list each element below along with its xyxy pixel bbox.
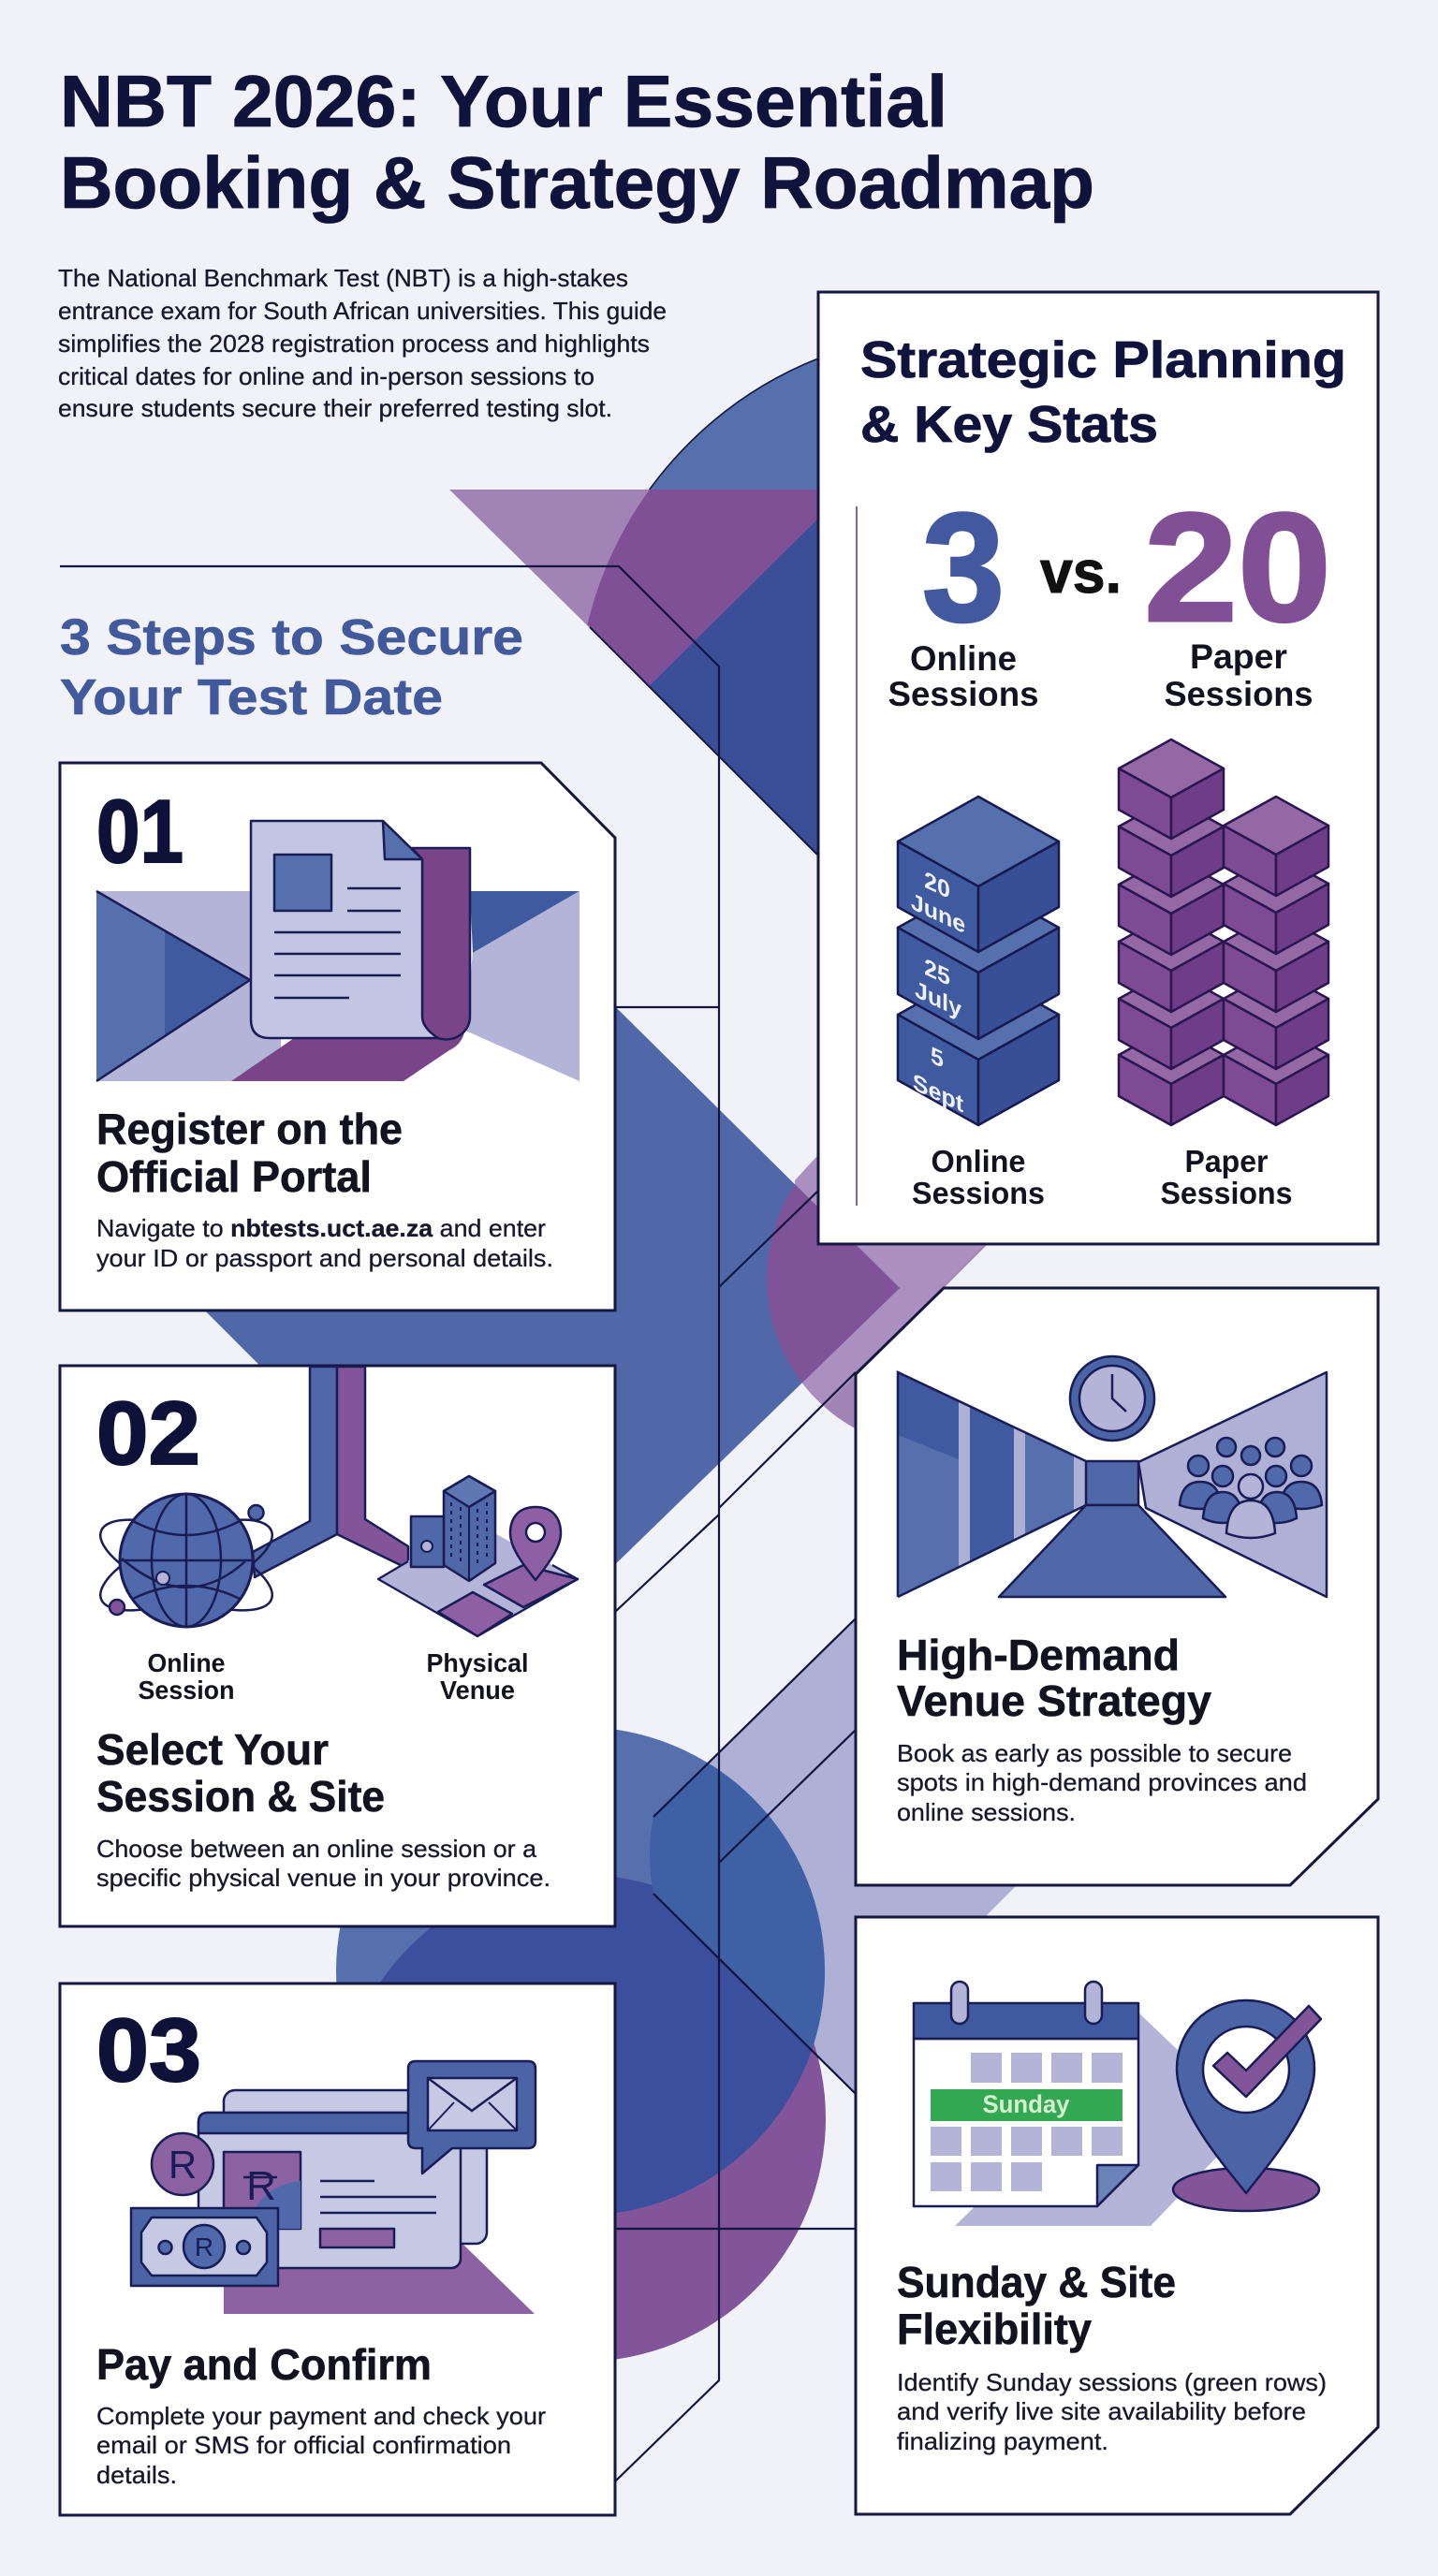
caption: online sessions: Sessions <box>912 1176 1045 1210</box>
step 03 description <box>96 2402 546 2489</box>
section heading: 3 steps <box>60 609 523 725</box>
panel heading: & Key Stats <box>860 395 1158 453</box>
flexibility heading: Sunday & Site <box>897 2258 1176 2306</box>
label: online session: Session <box>139 1676 234 1705</box>
caption: online sessions <box>912 1144 1045 1210</box>
label: online sessions: Online <box>910 639 1017 678</box>
label: physical venue: Venue <box>440 1676 515 1705</box>
icon: payment window with money and message: R <box>169 2143 197 2187</box>
paper session cube grid <box>1119 739 1328 1125</box>
intro paragraph: ensure students secure their preferred testing slot. <box>58 394 612 422</box>
strategy heading <box>897 1631 1211 1725</box>
label: online session <box>139 1648 234 1705</box>
online session cube stack: Sept <box>913 1068 963 1118</box>
flexibility heading <box>897 2258 1176 2353</box>
intro paragraph: entrance exam for South African universities. This guide <box>58 297 667 325</box>
step 02 description: Choose between an online session or a <box>96 1835 537 1863</box>
strategy heading: Venue Strategy <box>897 1676 1211 1725</box>
step 03 description: details. <box>96 2461 177 2489</box>
label: online session: Online <box>148 1648 225 1677</box>
step 02 heading <box>96 1725 385 1821</box>
step 01 heading: Register on the <box>96 1105 403 1153</box>
background geometric shapes <box>140 331 1343 2362</box>
label: online sessions <box>888 639 1039 713</box>
section heading: 3 steps: Your Test Date <box>60 669 443 725</box>
online session cube stack <box>898 797 1059 1125</box>
panel: sunday and site flexibility <box>856 1917 1378 2514</box>
strategy description: spots in high-demand provinces and <box>897 1768 1307 1796</box>
step number 02: 02 <box>96 1383 200 1484</box>
stat: 3 vs 20: vs. <box>1040 538 1122 606</box>
connector lines <box>60 566 856 2481</box>
step 01 heading <box>96 1105 403 1201</box>
flexibility description <box>897 2368 1327 2455</box>
online session cube stack: June <box>911 887 965 939</box>
step 01 description: Navigate to nbtests.uct.ae.za and enter <box>96 1214 546 1242</box>
intro paragraph: The National Benchmark Test (NBT) is a high-stakes <box>58 264 628 292</box>
panel heading: Strategic Planning <box>860 330 1346 388</box>
flexibility description: finalizing payment. <box>897 2427 1108 2455</box>
panel: step 01 <box>60 763 615 1310</box>
flexibility description: and verify live site availability before <box>897 2397 1306 2425</box>
step 02 heading: Session & Site <box>96 1772 385 1821</box>
intro paragraph <box>58 264 667 422</box>
panel: strategic planning and key stats <box>818 292 1378 1244</box>
strategy description <box>897 1739 1307 1826</box>
step number 03: 03 <box>96 2000 201 2100</box>
step 02 description <box>96 1835 550 1892</box>
label: paper sessions: Paper <box>1190 637 1287 676</box>
step 01 description <box>96 1214 553 1272</box>
connector: session choice branch <box>253 1367 408 1577</box>
intro paragraph: simplifies the 2028 registration process and highlights <box>58 329 650 358</box>
flexibility description: Identify Sunday sessions (green rows) <box>897 2368 1327 2396</box>
section heading: 3 steps: 3 Steps to Secure <box>60 609 523 666</box>
title <box>60 60 1094 224</box>
panel heading <box>860 330 1346 453</box>
title: Booking & Strategy Roadmap <box>60 141 1094 224</box>
online session cube stack: July <box>915 975 961 1024</box>
icon: map and buildings <box>378 1476 578 1636</box>
panel: step 03 <box>60 1983 615 2515</box>
stat: 3 vs 20: 3 <box>922 481 1005 653</box>
caption: paper sessions: Sessions <box>1161 1176 1292 1210</box>
icon: payment window with money and message: R <box>195 2232 213 2261</box>
icon: calendar with Sunday row and location pin: Sunday <box>983 2090 1069 2118</box>
step 02 description: specific physical venue in your province. <box>96 1864 550 1892</box>
icon: hallway with clock and crowd <box>898 1356 1327 1597</box>
online session cube stack: 5 <box>931 1041 944 1074</box>
stat: 3 vs 20 <box>922 481 1331 653</box>
step number 01: 01 <box>96 782 183 882</box>
intro paragraph: critical dates for online and in-person sessions to <box>58 362 594 390</box>
label: online sessions: Sessions <box>888 675 1039 713</box>
caption: paper sessions: Paper <box>1185 1144 1269 1178</box>
strategy description: Book as early as possible to secure <box>897 1739 1292 1767</box>
strategy description: online sessions. <box>897 1798 1076 1826</box>
flexibility heading: Flexibility <box>897 2305 1092 2353</box>
step 03 description: Complete your payment and check your <box>96 2402 546 2430</box>
label: physical venue <box>427 1648 528 1705</box>
icon: payment window with money and message <box>131 2061 536 2314</box>
strategy heading: High-Demand <box>897 1631 1180 1679</box>
online session cube stack: 20 <box>924 866 950 904</box>
icon: calendar with Sunday row and location pin <box>914 1982 1321 2226</box>
step 02 heading: Select Your <box>96 1725 329 1774</box>
panel: high-demand venue strategy <box>856 1288 1378 1885</box>
icon: globe <box>89 1494 284 1629</box>
step 01 description: your ID or passport and personal details. <box>96 1244 553 1272</box>
step 03 heading: Pay and Confirm <box>96 2340 432 2389</box>
panel: step 02 <box>60 1366 615 1926</box>
label: paper sessions: Sessions <box>1165 675 1313 713</box>
icon: document and envelope <box>96 821 580 1081</box>
icon: payment window with money and message: R <box>246 2163 276 2209</box>
label: physical venue: Physical <box>427 1648 528 1677</box>
caption: online sessions: Online <box>931 1144 1026 1178</box>
step 03 description: email or SMS for official confirmation <box>96 2431 511 2459</box>
label: paper sessions <box>1165 637 1313 713</box>
caption: paper sessions <box>1161 1144 1292 1210</box>
title: NBT 2026: Your Essential <box>60 60 947 142</box>
online session cube stack: 25 <box>924 953 950 991</box>
step 01 heading: Official Portal <box>96 1152 372 1201</box>
stat: 3 vs 20: 20 <box>1144 481 1331 653</box>
